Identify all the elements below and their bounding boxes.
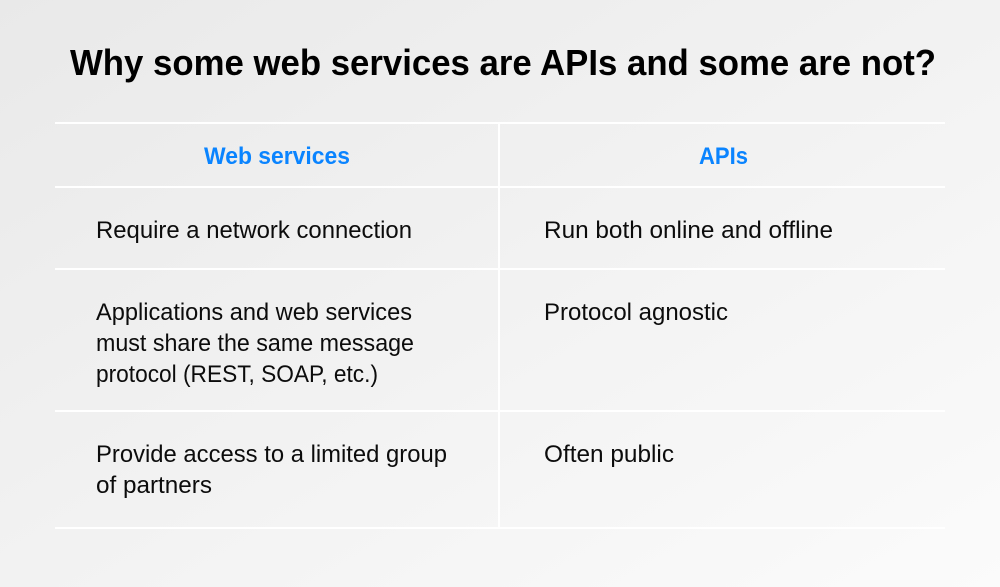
- row 3: APIs: Often public: [544, 441, 674, 468]
- comparison table: [55, 122, 945, 529]
- row 2: APIs: Protocol agnostic: [544, 299, 728, 326]
- row 2: web services: [96, 299, 414, 388]
- column heading: web services: Web services: [204, 143, 350, 170]
- row 3: web services: [96, 441, 447, 499]
- row 2: web services: protocol (REST, SOAP, etc.): [96, 361, 378, 388]
- row 2: web services: must share the same message: [96, 330, 414, 357]
- title: Why some web services are APIs and some are not?: [70, 42, 936, 83]
- row 3: web services: Provide access to a limited group: [96, 441, 447, 468]
- row 2: web services: Applications and web services: [96, 299, 412, 326]
- row 1: web services: Require a network connection: [96, 217, 412, 244]
- row 3: web services: of partners: [96, 472, 212, 499]
- column heading: APIs: APIs: [699, 143, 748, 170]
- row 1: APIs: Run both online and offline: [544, 217, 833, 244]
